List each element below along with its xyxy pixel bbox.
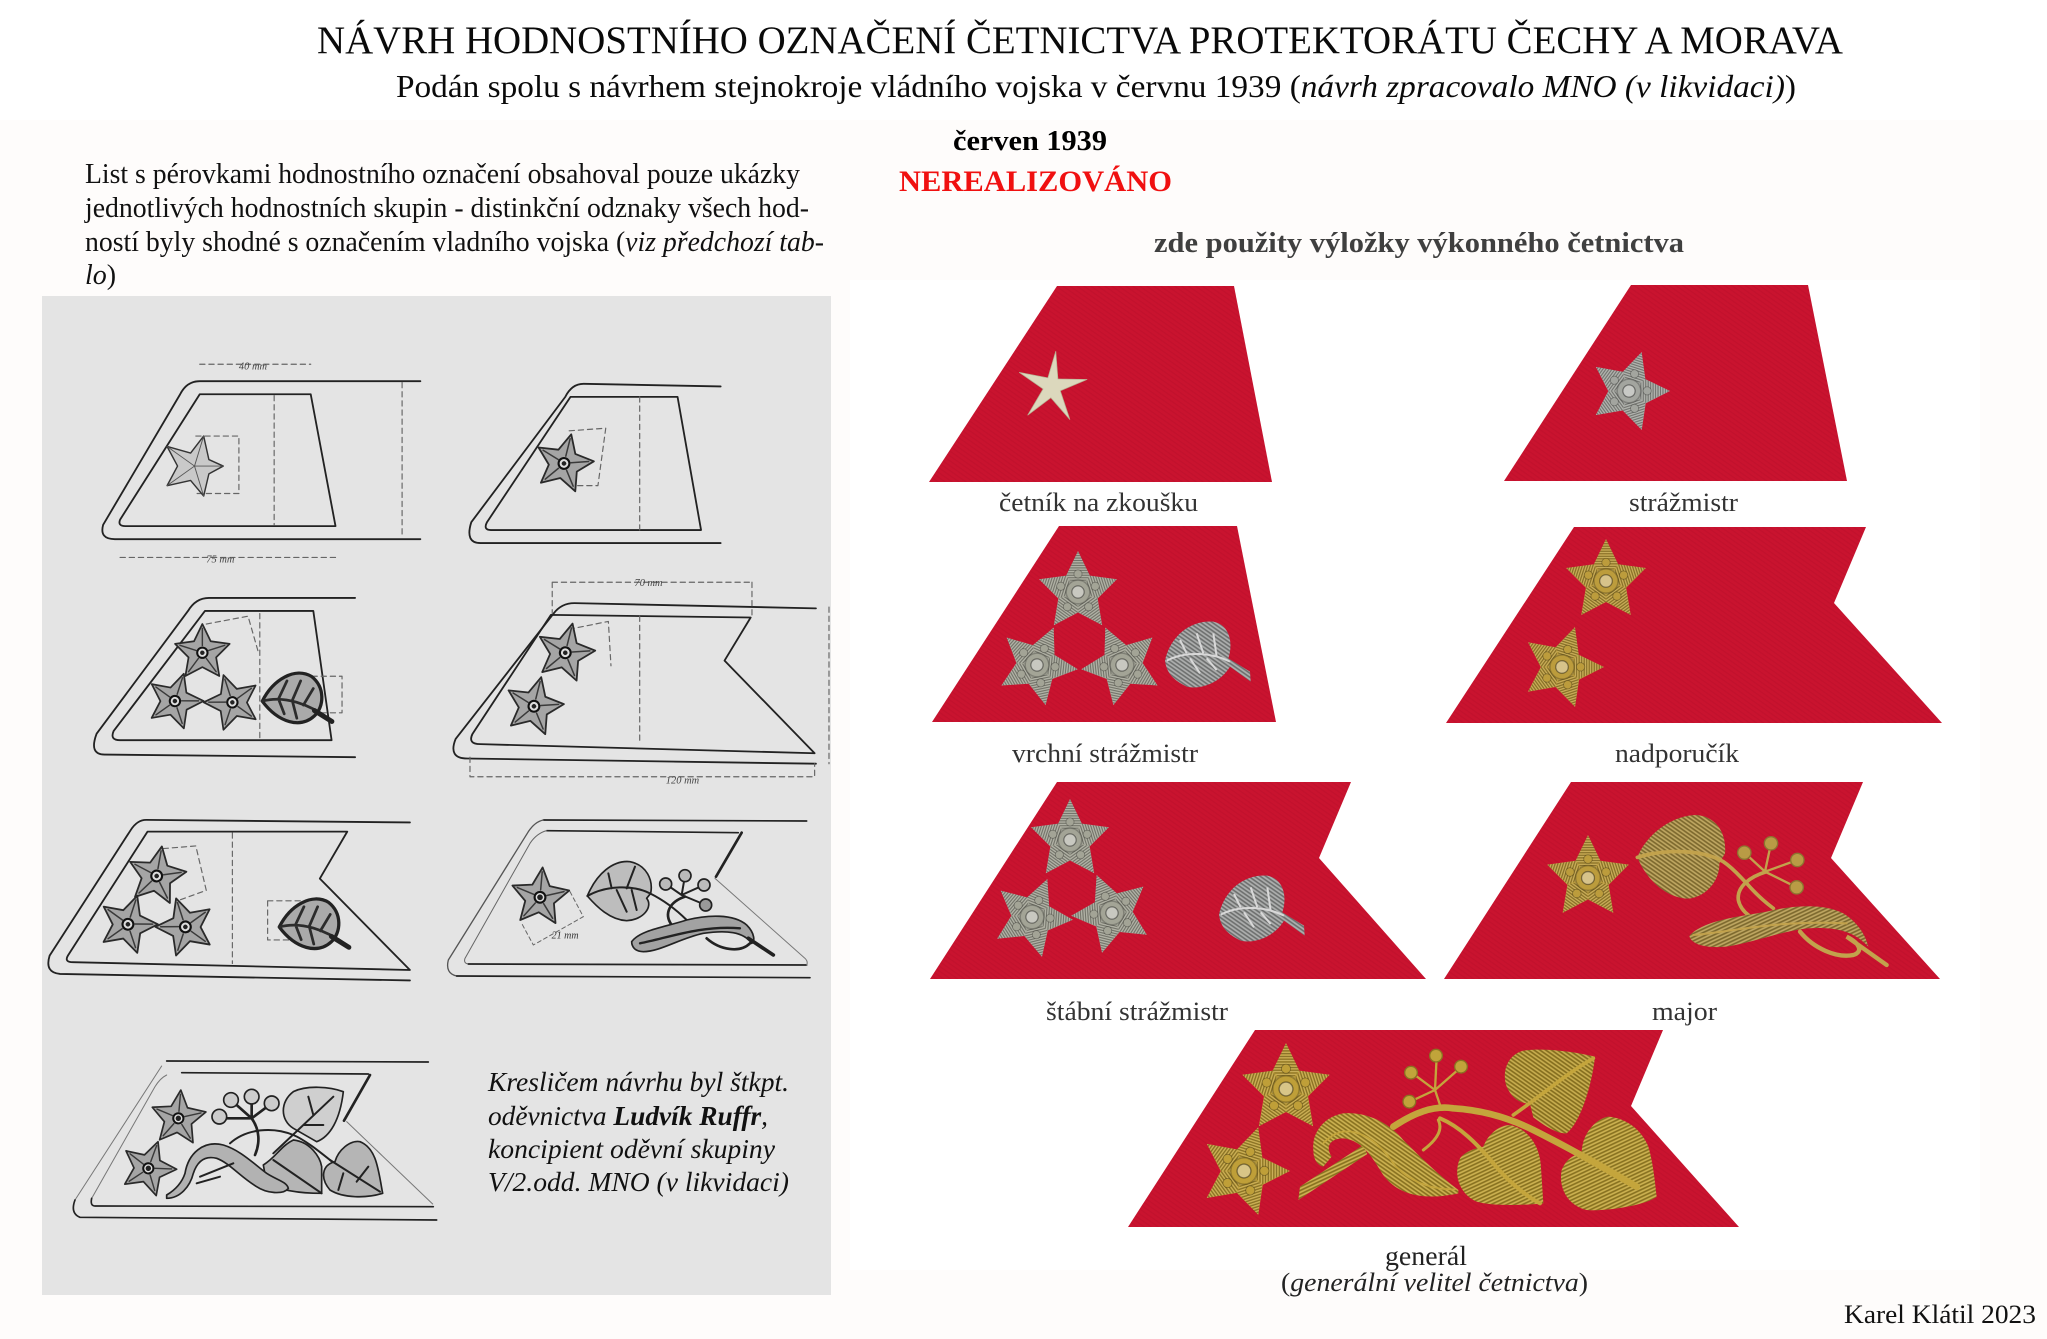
insignia: major: [1444, 782, 1940, 979]
status: not realised: NEREALIZOVÁNO: [899, 165, 1172, 198]
insignia: četník na zkoušku: [929, 286, 1272, 482]
intro text block: jednotlivých hodnostních skupin - distinkční odznaky všech hod-: [84, 193, 809, 224]
intro text block: List s pérovkami hodnostního označení obsahoval pouze ukázky: [85, 159, 800, 190]
insignia: strážmistr: [1504, 285, 1847, 481]
drawing: two stars notched collar: 70 mm: [634, 578, 663, 589]
icon: gold stars: [1508, 539, 1650, 720]
drawing: major collar: 21 mm: [552, 930, 579, 941]
icon: gold linden branch: [1298, 1049, 1657, 1210]
background: insignia panel: [850, 280, 1980, 1270]
background: title band: [0, 0, 2047, 120]
intro text block: ností byly shodné s označením vladního vojska (viz předchozí tab-: [85, 227, 824, 258]
label: generál: generál: [1385, 1241, 1467, 1271]
drawing: major collar: [448, 820, 810, 978]
icon: silver leaf: [1165, 622, 1251, 687]
icon: silver leaf: [1219, 876, 1305, 941]
drawing: probationary gendarme collar: 75 mm: [206, 555, 235, 566]
icon: silver star: [1576, 339, 1682, 442]
label: general commander note: (generální velitel četnictva ): [1281, 1268, 1588, 1297]
panel: scanned pen drawings: [42, 296, 831, 1295]
subtitle: Podán spolu s návrhem stejnokroje vládního vojska v červnu 1939 ( návrh zpracovalo MNO (v likvidaci) ): [396, 68, 1796, 104]
label: štábní strážmistr: [1046, 997, 1228, 1026]
right column heading: zde použity výložky výkonného četnictva: [1154, 227, 1685, 259]
label: strážmistr: [1629, 488, 1738, 517]
drawing: two stars notched collar: [453, 578, 829, 786]
drawing: probationary gendarme collar: 40 mm: [239, 361, 267, 372]
note about the draftsman: koncipient oděvní skupiny: [488, 1134, 775, 1164]
insignia: nadporučík: [1446, 527, 1942, 723]
author credit: Karel Klátil 2023: [1844, 1300, 2036, 1329]
label: četník na zkoušku: [999, 488, 1198, 517]
drawing: general collar: [73, 1061, 437, 1220]
drawing: three stars leaf notched collar: [48, 820, 410, 980]
icon: gold star: [1543, 835, 1633, 920]
intro text block: [84, 159, 824, 291]
icon: cream star: [1015, 348, 1090, 421]
title: NÁVRH HODNOSTNÍHO OZNAČENÍ ČETNICTVA PROTEKTORÁTU ČECHY A MORAVA: [317, 18, 1843, 62]
date heading: červen 1939: [953, 125, 1107, 157]
icon: silver stars: [982, 551, 1177, 719]
insignia: štábní strážmistr: [930, 782, 1426, 979]
insignia: vrchní strážmistr: [932, 526, 1276, 722]
insignia: generál: [1128, 1030, 1739, 1229]
drawing: three stars and leaf collar: [94, 598, 355, 757]
drawing: two stars notched collar: 120 mm: [666, 775, 700, 786]
note about the draftsman: oděvnictva Ludvík Ruffr,: [488, 1101, 768, 1131]
drawing: probationary gendarme collar: [102, 361, 420, 566]
drawing: senior collar one star: [469, 384, 721, 543]
icon: gold stars: [1185, 1043, 1334, 1229]
label: vrchní strážmistr: [1012, 739, 1198, 768]
intro text block: lo): [85, 260, 116, 291]
icon: gold branch: [1637, 815, 1887, 965]
note about the draftsman: [487, 1067, 789, 1197]
label: nadporučík: [1615, 739, 1739, 768]
label: major: [1652, 997, 1717, 1026]
icon: silver stars: [977, 799, 1167, 970]
note about the draftsman: Kresličem návrhu byl štkpt.: [487, 1067, 789, 1097]
note about the draftsman: V/2.odd. MNO (v likvidaci): [488, 1167, 789, 1197]
